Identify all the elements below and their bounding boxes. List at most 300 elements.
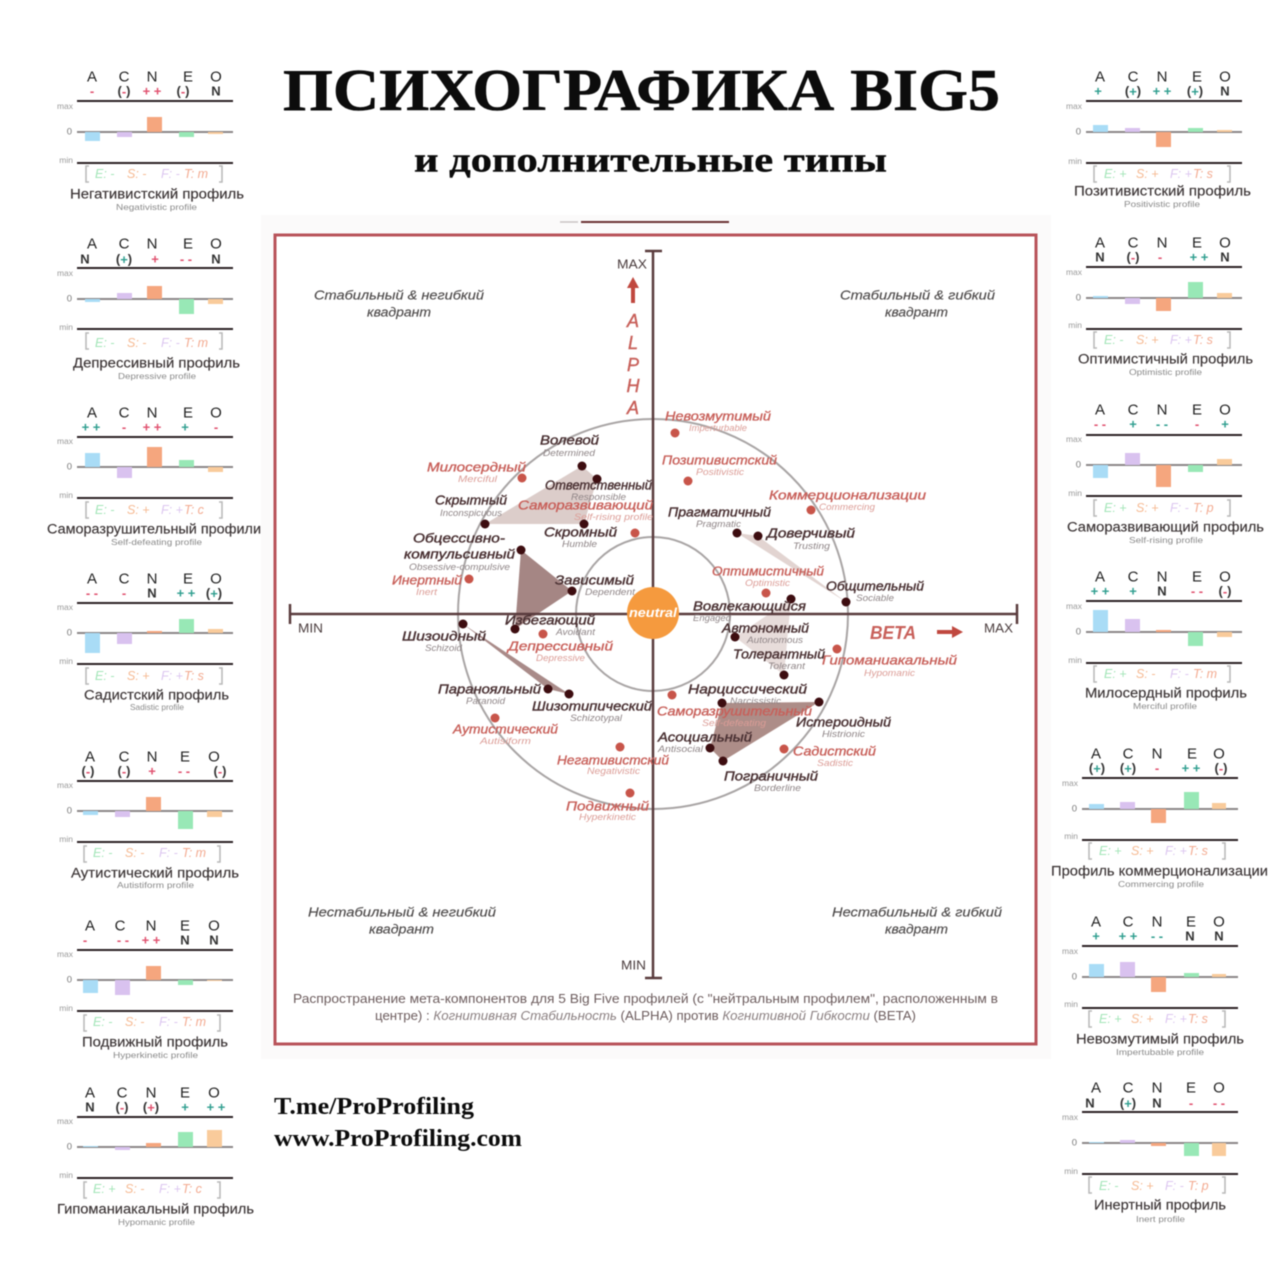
profile: Садистский: N — [147, 586, 157, 600]
profile: Коммерционализации: Профиль коммерционализации — [1051, 864, 1268, 878]
axis labels — [298, 256, 1013, 972]
profile: Невозмутимый: N — [1152, 914, 1162, 930]
profile: Невозмутимый: 0 — [1072, 972, 1077, 982]
profile: Инертный: - - — [1213, 1096, 1225, 1110]
point: Депрессивный: Депрессивный — [506, 638, 613, 654]
profile: Садистский: 0 — [67, 628, 72, 638]
point: Негативистский: Негативистский — [557, 752, 669, 768]
profile: Оптимистичный: min — [1068, 320, 1082, 330]
profile: Коммерционализации: 0 — [1072, 804, 1077, 814]
profile: Коммерционализации: - — [1155, 760, 1159, 776]
point: Прагматичный: Pragmatic — [696, 519, 742, 529]
profile: Саморазвивающий: O — [1219, 402, 1231, 418]
profile: Коммерционализации — [1051, 746, 1268, 889]
point: Коммерционализации — [769, 488, 926, 514]
profile: Позитивистский: (+) — [1187, 84, 1203, 98]
quadrant: unstable flexible: Нестабильный & гибкий — [832, 904, 1002, 920]
point: Милосердный — [427, 460, 526, 484]
point: Пограничный — [718, 756, 818, 793]
point: Обцессивно-компульсивный: компульсивный — [404, 546, 515, 562]
point: Депрессивный: Depressive — [536, 653, 585, 663]
profile: Депрессивный: F: - — [161, 336, 180, 350]
chart caption — [293, 992, 998, 1023]
profile: Саморазрушительный: + — [181, 420, 189, 434]
quadrant: unstable inflexible: Нестабильный & негибкий — [308, 904, 496, 920]
quadrant: unstable inflexible: квадрант — [369, 922, 434, 936]
source links: T.me/ProProfiling — [274, 1094, 474, 1120]
profile: Депрессивный: 0 — [67, 294, 72, 304]
profile: Гипоманиакальный: + + — [207, 1100, 226, 1114]
profile: Садистский: N — [147, 570, 157, 588]
profile: Инертный: N — [1152, 1096, 1162, 1110]
profile: Гипоманиакальный: A — [85, 1084, 95, 1102]
point: Шизоидный — [402, 620, 486, 653]
profile: Позитивистский: F: + — [1170, 167, 1192, 181]
profile: Депрессивный — [57, 236, 240, 381]
profile: Коммерционализации: T: s — [1188, 844, 1208, 858]
profile: Милосердный: E — [1192, 568, 1202, 586]
profile: Саморазрушительный: min — [59, 490, 73, 500]
profile: Оптимистичный: F: + — [1170, 333, 1192, 347]
point: Саморазвивающий: Self-rising profile — [574, 512, 653, 522]
profile: Негативистский: F: - — [161, 167, 180, 181]
profile: Депрессивный: Depressive profile — [118, 371, 196, 381]
profile: Оптимистичный: N — [1220, 250, 1230, 264]
profile: Саморазвивающий: - — [1195, 416, 1199, 432]
arrow: beta right — [937, 626, 963, 638]
profile: Позитивистский: + + — [1153, 84, 1172, 98]
profile: Коммерционализации: A — [1091, 746, 1101, 762]
profile: Депрессивный: C — [119, 236, 130, 252]
profile: Гипоманиакальный: E: + — [93, 1182, 116, 1196]
point: Садистский: Sadistic — [817, 758, 854, 768]
profile: Позитивистский — [1066, 68, 1251, 209]
profile: Оптимистичный: N — [1157, 234, 1167, 252]
profile: Позитивистский: (+) — [1125, 84, 1141, 98]
profile: Милосердный: N — [1157, 584, 1167, 598]
profile: Депрессивный: max — [57, 268, 74, 278]
profile: Депрессивный: N — [147, 236, 157, 252]
profile: Милосердный: T: m — [1193, 667, 1217, 681]
profile: Позитивистский: Positivistic profile — [1124, 199, 1200, 209]
point: Зависимый: Dependent — [585, 587, 636, 597]
point: Саморазрушительный — [657, 690, 812, 728]
axes — [290, 251, 1017, 978]
alpha label: A — [626, 398, 639, 418]
profile: Подвижный: 0 — [67, 974, 72, 986]
point: Депрессивный — [506, 630, 613, 663]
profile: Депрессивный: - - — [180, 252, 192, 266]
profile: Позитивистский: max — [1066, 101, 1083, 111]
profile: Аутистический: - - — [178, 764, 190, 778]
profile: Инертный: Inert profile — [1136, 1214, 1185, 1224]
profile: Садистский: Sadistic profile — [130, 702, 184, 712]
profile: Гипоманиакальный: C — [117, 1084, 128, 1102]
point: Аутистический — [452, 714, 558, 746]
profile: Саморазрушительный: E — [183, 404, 193, 422]
profile: Позитивистский: A — [1095, 68, 1105, 86]
profile: Подвижный: E: - — [93, 1015, 112, 1029]
profile: Саморазвивающий: T: p — [1193, 501, 1214, 515]
profile: Милосердный: max — [1066, 601, 1083, 611]
profile: Инертный: E — [1186, 1080, 1196, 1096]
profile: Милосердный: E: + — [1104, 667, 1127, 681]
profile: Невозмутимый — [1062, 914, 1244, 1057]
profile: Саморазрушительный: Self-defeating profile — [111, 537, 202, 547]
profile: Депрессивный: S: - — [127, 336, 146, 350]
profile: Негативистский: (-) — [176, 84, 190, 98]
point: Истероидный: Истероидный — [796, 714, 891, 730]
profile: Гипоманиакальный: Гипоманиакальный профиль — [57, 1202, 254, 1216]
profile: Милосердный: S: - — [1136, 667, 1155, 681]
profile: Оптимистичный: O — [1219, 234, 1231, 252]
profile: Инертный: E: - — [1099, 1179, 1118, 1193]
profile: Депрессивный: E: - — [95, 336, 114, 350]
profile: Позитивистский: + — [1094, 84, 1102, 98]
profile: Садистский: F: + — [161, 669, 183, 683]
profile: Оптимистичный: + + — [1190, 250, 1209, 264]
quadrant: unstable flexible — [832, 904, 1002, 936]
profile: Негативистский: T: m — [184, 167, 208, 181]
profile: Коммерционализации: O — [1213, 746, 1225, 762]
profile: Садистский: + + — [177, 586, 196, 600]
profile: Аутистический: C — [119, 748, 130, 766]
profile: Милосердный: Merciful profile — [1133, 701, 1197, 711]
profile: Коммерционализации: N — [1152, 746, 1162, 762]
point: Оптимистичный: Оптимистичный — [712, 564, 824, 578]
profile: Невозмутимый: S: + — [1131, 1012, 1154, 1026]
profile: Садистский: C — [119, 570, 130, 588]
subtitle: и дополнительные типы — [414, 140, 887, 180]
profile: Подвижный: N — [180, 932, 190, 948]
concentric circles — [458, 419, 848, 809]
profile: Милосердный: - - — [1191, 584, 1203, 598]
profile: Негативистский: max — [57, 101, 74, 111]
profile: Негативистский: O — [210, 68, 222, 86]
profile: Саморазрушительный: E: - — [95, 503, 114, 517]
profile: Инертный — [1062, 1080, 1238, 1224]
profile: Подвижный: N — [209, 932, 219, 948]
point: Обцессивно-компульсивный — [404, 530, 526, 572]
point: Вовлекающийся — [693, 594, 806, 623]
profile: Саморазрушительный: max — [57, 436, 74, 446]
profile: Аутистический: 0 — [67, 806, 72, 816]
point: Доверчивый: Доверчивый — [765, 526, 855, 540]
profile: Саморазрушительный: A — [87, 404, 97, 422]
profile: Оптимистичный: max — [1066, 267, 1083, 277]
profile: Садистский: E: - — [95, 669, 114, 683]
profile: Милосердный: min — [1068, 655, 1082, 665]
point: Саморазрушительный: Self-defeating — [702, 718, 766, 728]
profile: Позитивистский: C — [1128, 68, 1139, 86]
profile: Позитивистский: S: + — [1136, 167, 1159, 181]
point: Шизоидный: Шизоидный — [402, 628, 486, 644]
profile: Негативистский: A — [87, 68, 97, 86]
profile: Подвижный: S: - — [125, 1015, 144, 1029]
profile: Негативистский: 0 — [67, 126, 72, 138]
point: Волевой: Determined — [543, 448, 596, 458]
point: Автономный: Автономный — [721, 620, 809, 636]
title: ПСИХОГРАФИКА BIG5 — [283, 57, 1000, 123]
profile: Милосердный: A — [1095, 568, 1105, 586]
point: Общительный: Sociable — [856, 593, 894, 603]
profile: Позитивистский: min — [1068, 156, 1082, 166]
profile: Негативистский: S: - — [127, 167, 146, 181]
profile: Негативистский: min — [59, 155, 73, 165]
point: Шизотипический: Шизотипический — [532, 698, 652, 714]
alpha label: A — [626, 311, 639, 331]
quadrant: stable inflexible — [314, 288, 484, 320]
point: Саморазвивающий: Саморазвивающий — [518, 498, 653, 512]
profile: Негативистский — [57, 68, 244, 212]
profile: Саморазвивающий: F: - — [1170, 501, 1189, 515]
profile: Аутистический: E: - — [93, 846, 112, 860]
profile: Подвижный: min — [59, 1003, 73, 1013]
profile: Аутистический: A — [85, 748, 95, 766]
profile: Подвижный: Hyperkinetic profile — [113, 1050, 198, 1060]
point: Невозмутимый — [665, 408, 771, 438]
profile: Невозмутимый: O — [1213, 914, 1225, 930]
profile: Коммерционализации: F: + — [1165, 844, 1187, 858]
quadrant: stable inflexible: квадрант — [367, 304, 431, 320]
profile: Аутистический: (-) — [117, 764, 131, 778]
profile: Оптимистичный: (-) — [1126, 250, 1140, 264]
profile: Оптимистичный — [1066, 234, 1253, 377]
point: Негативистский — [557, 742, 669, 776]
profile: Подвижный: O — [208, 918, 220, 934]
point: Нарциссический — [688, 682, 807, 708]
point: Коммерционализации: Commercing — [819, 502, 875, 512]
profile: Аутистический: Аутистический профиль — [71, 866, 239, 880]
profile: Подвижный: N — [146, 918, 156, 934]
profile: Саморазвивающий: - - — [1156, 416, 1168, 432]
profile: Садистский: S: + — [127, 669, 150, 683]
profile: Садистский — [57, 570, 233, 712]
profile: Аутистический: min — [59, 834, 73, 844]
point: Садистский — [780, 744, 876, 768]
profile: Позитивистский: Позитивистский профиль — [1074, 184, 1251, 198]
point: Милосердный: Merciful — [458, 474, 498, 484]
profile: Саморазвивающий: E: + — [1104, 501, 1127, 515]
profile: Аутистический: Autistiform profile — [117, 880, 194, 890]
profile: Саморазрушительный: O — [210, 404, 222, 422]
profile: Аутистический: S: - — [125, 846, 144, 860]
profile: Садистский: (+) — [206, 586, 222, 600]
profile: Садистский: - - — [86, 586, 98, 600]
profile: Оптимистичный: N — [1095, 250, 1105, 264]
point: Зависимый — [555, 572, 636, 597]
point: Доверчивый — [754, 526, 855, 551]
point: Общительный — [826, 578, 924, 606]
profile: Милосердный: O — [1219, 568, 1231, 586]
profile: Позитивистский: N — [1157, 68, 1167, 86]
profile: Милосердный — [1066, 568, 1247, 711]
point: Толерантный: Tolerant — [768, 661, 806, 671]
profile: Гипоманиакальный: Hypomanic profile — [118, 1217, 195, 1227]
profile: Инертный: - — [1189, 1096, 1193, 1110]
profile: Милосердный: F: - — [1170, 667, 1189, 681]
point: Автономный: Autonomous — [746, 635, 804, 645]
point: Гипоманиакальный: Гипоманиакальный — [822, 652, 957, 668]
point: Гипоманиакальный — [822, 644, 957, 678]
point: Асоциальный — [657, 730, 752, 754]
profile: Саморазвивающий: Саморазвивающий профиль — [1067, 520, 1264, 534]
profile: Инертный: O — [1213, 1080, 1225, 1096]
profile: Садистский: A — [87, 570, 97, 588]
point: Аутистический: Autisiform — [479, 736, 532, 746]
point: Подвижный — [566, 788, 649, 822]
point: Шизотипический — [532, 690, 652, 723]
point: Асоциальный: Antisocial — [657, 744, 704, 754]
profile: Негативистский: Negativistic profile — [116, 202, 197, 212]
profile: Саморазрушительный: S: + — [127, 503, 150, 517]
profile: Гипоманиакальный — [57, 1084, 254, 1227]
profile: Инертный: S: + — [1131, 1179, 1154, 1193]
profile: Невозмутимый: + — [1092, 928, 1100, 944]
point: Оптимистичный: Optimistic — [745, 578, 791, 588]
point: Зависимый: Зависимый — [555, 572, 634, 588]
quadrant: stable flexible: Стабильный & гибкий — [840, 288, 995, 302]
point: Невозмутимый: Невозмутимый — [665, 408, 771, 424]
point: Избегающий: Избегающий — [505, 612, 595, 628]
profile: Гипоманиакальный: max — [57, 1116, 74, 1126]
chart caption: Распространение мета-компонентов для 5 Big Five профилей (с "нейтральным профилем", расположенным в — [293, 992, 998, 1006]
profile: Депрессивный: (+) — [116, 252, 132, 266]
profile: Оптимистичный: S: + — [1136, 333, 1159, 347]
profile: Невозмутимый: max — [1062, 946, 1079, 956]
point: Асоциальный: Асоциальный — [657, 730, 752, 744]
point: Инертный — [392, 572, 474, 597]
profile: Невозмутимый: N — [1185, 928, 1195, 944]
profile: Гипоманиакальный: T: c — [182, 1182, 203, 1196]
point: Подвижный: Hyperkinetic — [579, 812, 637, 822]
profile: Оптимистичный: 0 — [1076, 292, 1081, 304]
profile: Гипоманиакальный: E — [180, 1084, 190, 1102]
profile: Гипоманиакальный: N — [146, 1084, 156, 1102]
point: Аутистический: Аутистический — [452, 722, 558, 736]
profile: Саморазвивающий: A — [1095, 402, 1105, 418]
profile: Инертный: A — [1091, 1080, 1101, 1096]
profile: Подвижный: - — [83, 932, 87, 948]
profile: Саморазрушительный: + + — [143, 420, 162, 434]
point: Ответственный: Ответственный — [545, 478, 652, 492]
profile: Коммерционализации: C — [1123, 746, 1134, 762]
point: Скромный — [544, 520, 617, 549]
profile: Коммерционализации: (+) — [1089, 760, 1105, 776]
chart caption: центре) : Когнитивная Стабильность (ALPHA) против Когнитивной Гибкости (BETA) — [375, 1009, 916, 1023]
profile: Милосердный: C — [1128, 568, 1139, 586]
profile: Коммерционализации: max — [1062, 778, 1079, 788]
profile: Позитивистский: T: s — [1193, 167, 1213, 181]
profile: Подвижный: - - — [117, 932, 129, 948]
profile: Инертный: N — [1085, 1096, 1095, 1110]
profile: Негативистский: N — [211, 84, 221, 98]
profile: Депрессивный: N — [211, 252, 221, 266]
point: Шизотипический: Schizotypal — [570, 713, 623, 723]
point: Толерантный: Толерантный — [733, 646, 825, 662]
point: Коммерционализации: Коммерционализации — [769, 488, 926, 502]
quadrant: unstable inflexible — [308, 904, 496, 936]
profile: Инертный: max — [1062, 1112, 1079, 1122]
profile: Гипоманиакальный: min — [59, 1170, 73, 1180]
profile: Подвижный: max — [57, 949, 74, 959]
point: Нарциссический: Нарциссический — [688, 682, 807, 696]
point: Саморазвивающий — [518, 498, 653, 538]
profile: Коммерционализации: E: + — [1099, 844, 1122, 858]
profile: Коммерционализации: E — [1187, 746, 1197, 762]
profile: Саморазвивающий — [1066, 402, 1264, 545]
point: Позитивистский: Позитивистский — [662, 452, 777, 468]
profile: Невозмутимый: Impertubable profile — [1116, 1047, 1204, 1057]
point: Милосердный: Милосердный — [427, 460, 526, 474]
profile: Садистский: O — [210, 570, 222, 588]
point: Истероидный — [796, 698, 891, 739]
profile: Инертный: (+) — [1120, 1096, 1136, 1110]
point: Волевой: Волевой — [540, 432, 599, 448]
profile: Гипоманиакальный: + — [181, 1100, 189, 1114]
profile: Депрессивный: E — [183, 236, 193, 252]
profile: Саморазрушительный: Саморазрушительный профили — [47, 522, 261, 536]
profile: Позитивистский: E: + — [1104, 167, 1127, 181]
profile: Депрессивный: + — [151, 252, 159, 266]
profile: Милосердный: (-) — [1218, 584, 1232, 598]
point: Инертный: Инертный — [392, 572, 462, 588]
quadrant: stable inflexible: Стабильный & негибкий — [314, 288, 484, 302]
profile: Невозмутимый: C — [1123, 914, 1134, 930]
profile: Гипоманиакальный: N — [85, 1100, 95, 1114]
profile: Негативистский: + + — [143, 84, 162, 98]
profile: Саморазвивающий: 0 — [1076, 460, 1081, 470]
profile: Саморазрушительный: T: c — [184, 503, 205, 517]
profile: Подвижный: T: m — [182, 1015, 206, 1029]
point: Позитивистский: Positivistic — [696, 467, 745, 477]
profile: Негативистский: - — [90, 84, 94, 98]
alpha label: L — [628, 333, 638, 353]
profile: Аутистический: (-) — [81, 764, 95, 778]
profile: Инертный: N — [1152, 1080, 1162, 1096]
profile: Садистский: Садистский профиль — [84, 688, 229, 702]
point: Избегающий — [505, 612, 596, 637]
profile: Оптимистичный: E — [1192, 234, 1202, 252]
profile: Аутистический: (-) — [213, 764, 227, 778]
beta label: BETA — [870, 623, 916, 643]
profile: Коммерционализации: min — [1064, 831, 1078, 841]
profile: Саморазрушительный: - — [214, 420, 218, 434]
profile: Гипоманиакальный: S: - — [125, 1182, 144, 1196]
profile: Подвижный: F: - — [159, 1015, 178, 1029]
profile: Гипоманиакальный: O — [208, 1084, 220, 1102]
profile: Невозмутимый: + + — [1119, 928, 1138, 944]
point: Пограничный: Пограничный — [724, 768, 818, 784]
profile: Невозмутимый: Невозмутимый профиль — [1076, 1032, 1244, 1046]
profile: Оптимистичный: E: - — [1104, 333, 1123, 347]
profile: Оптимистичный: C — [1128, 234, 1139, 252]
point: Саморазрушительный: Саморазрушительный — [657, 704, 812, 718]
profile: Аутистический: F: - — [159, 846, 178, 860]
profile: Инертный: C — [1123, 1080, 1134, 1096]
profile: Невозмутимый: min — [1064, 999, 1078, 1009]
profile: Аутистический — [57, 748, 239, 890]
profile: Коммерционализации: (+) — [1120, 760, 1136, 776]
point: Скромный: Humble — [562, 539, 597, 549]
profile: Инертный: T: p — [1188, 1179, 1209, 1193]
profile: Негативистский: C — [119, 68, 130, 86]
point: Доверчивый: Trusting — [793, 541, 830, 551]
profile: Подвижный — [57, 918, 233, 1060]
point: Оптимистичный — [712, 564, 824, 598]
profile: Инертный: 0 — [1072, 1138, 1077, 1148]
panel: quadrant chart — [275, 235, 1036, 1044]
